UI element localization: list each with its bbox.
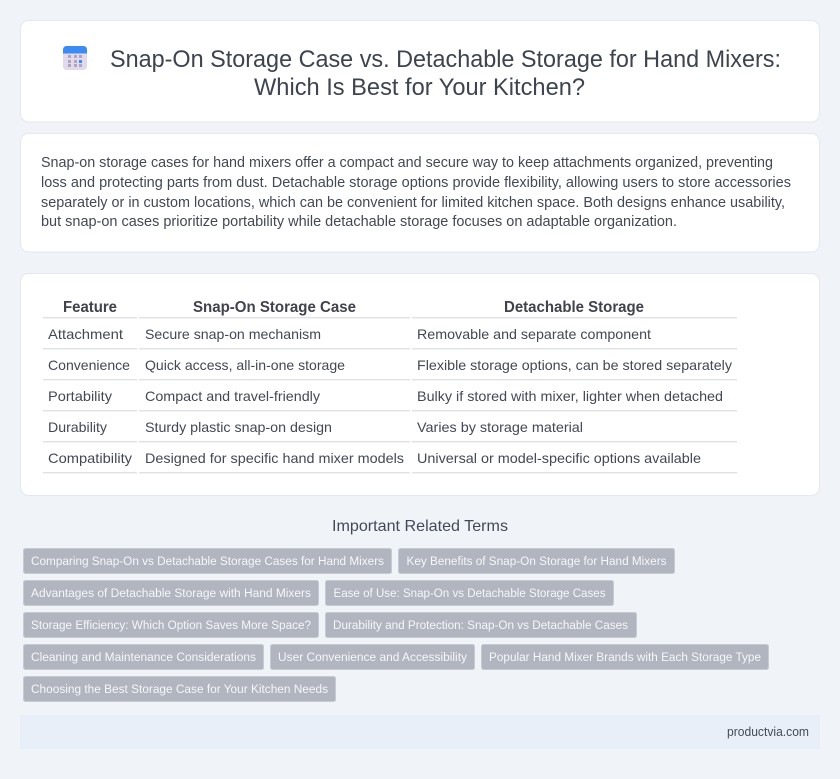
title	[110, 46, 781, 101]
table row: portability: Compact and travel-friendly	[145, 388, 320, 404]
table header row: Feature	[63, 299, 117, 316]
tag: Key Benefits of Snap-On Storage for Hand Mixers	[406, 554, 666, 568]
table row: attachment: Secure snap-on mechanism	[145, 326, 321, 342]
table row: convenience	[43, 357, 737, 380]
table row: convenience: Quick access, all-in-one storage	[145, 357, 345, 373]
table row: attachment: Removable and separate component	[417, 326, 651, 342]
table row: convenience: Flexible storage options, can be stored separately	[417, 357, 732, 373]
tag: Storage Efficiency: Which Option Saves More Space?	[31, 618, 311, 632]
table row: durability	[43, 419, 737, 442]
title: Snap-On Storage Case vs. Detachable Storage for Hand Mixers:	[110, 46, 781, 73]
table row: portability	[43, 388, 737, 411]
heading: important related terms: Important Related Terms	[332, 518, 508, 535]
panel: introduction text	[20, 134, 820, 252]
panel: comparison table	[20, 274, 820, 496]
table row: convenience: Convenience	[48, 357, 130, 373]
table row: durability: Varies by storage material	[417, 419, 583, 435]
tag	[326, 580, 614, 606]
table header row: Detachable Storage	[504, 299, 644, 316]
tag	[24, 580, 318, 606]
tag: Choosing the Best Storage Case for Your Kitchen Needs	[31, 682, 328, 696]
tag	[24, 676, 336, 702]
tag: Cleaning and Maintenance Considerations	[31, 650, 256, 664]
panel: introduction text: Snap-on storage cases for hand mixers offer a compact and secure way to keep attachments organized, preventing	[41, 155, 773, 171]
table row: compatibility: Compatibility	[48, 450, 132, 466]
panel: introduction text: loss and protecting parts from dust. Detachable storage options provide flexibility, allowing users to store accessories	[41, 175, 791, 191]
panel: introduction text: but snap-on cases prioritize portability while detachable storage focuses on adaptable organization.	[41, 214, 677, 230]
tags: related terms	[24, 548, 768, 702]
table row: compatibility: Designed for specific hand mixer models	[145, 450, 404, 466]
title: Which Is Best for Your Kitchen?	[254, 74, 585, 101]
tag: User Convenience and Accessibility	[278, 650, 468, 664]
footer bar	[20, 715, 820, 749]
tag: Advantages of Detachable Storage with Hand Mixers	[31, 586, 311, 600]
tag	[326, 612, 636, 638]
tag	[24, 644, 264, 670]
tag: Comparing Snap-On vs Detachable Storage Cases for Hand Mixers	[31, 554, 384, 568]
table row: attachment	[43, 326, 737, 349]
table header row	[43, 299, 737, 318]
table row: attachment: Attachment	[48, 326, 123, 342]
icon: calendar	[63, 46, 87, 70]
table header row: Snap-On Storage Case	[193, 299, 356, 316]
tag	[24, 548, 392, 574]
table row: compatibility	[43, 450, 737, 473]
tag: Ease of Use: Snap-On vs Detachable Storage Cases	[334, 586, 606, 600]
table row: portability: Bulky if stored with mixer, lighter when detached	[417, 388, 723, 404]
tag	[482, 644, 768, 670]
table row: durability: Sturdy plastic snap-on design	[145, 419, 332, 435]
tag	[270, 644, 474, 670]
table row: compatibility: Universal or model-specific options available	[417, 450, 701, 466]
tag	[24, 612, 318, 638]
tag: Durability and Protection: Snap-On vs Detachable Cases	[333, 618, 628, 632]
footer bar: productvia.com	[727, 725, 809, 739]
table row: portability: Portability	[48, 388, 112, 404]
table row: durability: Durability	[48, 419, 107, 435]
tag	[398, 548, 674, 574]
tag: Popular Hand Mixer Brands with Each Storage Type	[489, 650, 761, 664]
panel: title header	[20, 20, 820, 122]
panel: introduction text: separately or in custom locations, which can be convenient for limited kitchen space. Both designs enhance usability,	[41, 195, 785, 211]
